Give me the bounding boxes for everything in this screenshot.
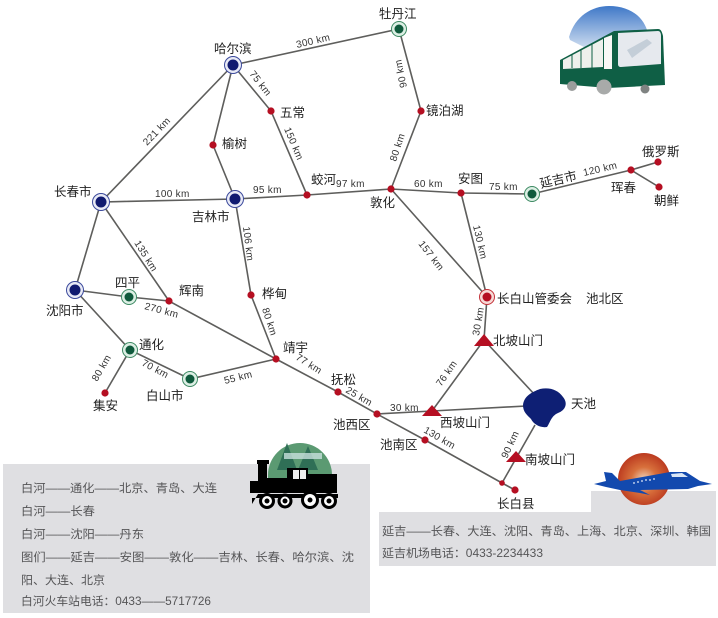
place names: 四平 xyxy=(115,276,140,290)
place names: 靖宇 xyxy=(283,340,308,355)
distance labels: 30 km xyxy=(471,306,487,337)
place names: 桦甸 xyxy=(262,286,287,301)
distance labels: 100 km xyxy=(155,189,190,200)
distance labels: 75 km xyxy=(489,182,518,193)
distance labels: 150 km xyxy=(281,126,305,162)
place names: 镜泊湖 xyxy=(426,103,464,118)
distance labels: 130 km xyxy=(470,224,489,260)
distance labels: 75 km xyxy=(247,69,273,98)
place names: 吉林市 xyxy=(192,209,230,224)
distance labels: 95 km xyxy=(253,185,282,196)
panel: airport information xyxy=(379,491,716,566)
place names: 白山市 xyxy=(146,388,184,403)
distance labels: 77 km xyxy=(293,352,324,377)
icon: bus xyxy=(560,6,665,94)
place names: 珲春 xyxy=(611,181,637,195)
place names: 沈阳市 xyxy=(46,303,84,318)
place names: 池西区 xyxy=(333,418,371,432)
airport routes text: 延吉——长春、大连、沈阳、青岛、上海、北京、深圳、韩国 xyxy=(382,524,711,538)
distance labels: 270 km xyxy=(143,301,179,321)
place names: 榆树 xyxy=(222,136,247,151)
railway routes text xyxy=(21,481,355,608)
distance labels: 80 km xyxy=(388,132,408,163)
place names: 五常 xyxy=(280,106,305,120)
distance labels: 70 km xyxy=(140,358,170,381)
place names: 抚松 xyxy=(331,373,356,387)
place names: 哈尔滨 xyxy=(214,41,252,56)
railway routes text: 白河火车站电话：0433——5717726 xyxy=(21,594,211,608)
distance labels: 76 km xyxy=(434,359,460,389)
icon: steam train xyxy=(250,443,338,508)
place names: 延吉市 xyxy=(538,168,578,191)
place names xyxy=(46,7,680,511)
place names: 池北区 xyxy=(586,292,624,306)
airport routes text xyxy=(382,524,711,560)
distance labels: 221 km xyxy=(141,116,173,148)
distance labels: 90 km xyxy=(393,58,410,89)
place names: 池南区 xyxy=(380,437,418,452)
railway routes text: 白河——长春 xyxy=(21,504,96,518)
place names: 朝鲜 xyxy=(654,194,679,208)
place names: 通化 xyxy=(139,338,165,352)
panel: railway information xyxy=(3,464,370,613)
distance labels: 60 km xyxy=(414,179,443,190)
distance labels xyxy=(90,32,618,460)
railway routes text: 白河——通化——北京、青岛、大连 xyxy=(21,481,218,495)
small town markers xyxy=(101,107,663,494)
place names: 辉南 xyxy=(179,283,204,298)
distance labels: 300 km xyxy=(295,32,331,51)
railway routes text: 图们——延吉——安图——敦化——吉林、长春、哈尔滨、沈 xyxy=(21,550,355,564)
airport routes text: 延吉机场电话：0433-2234433 xyxy=(382,546,543,560)
distance labels: 90 km xyxy=(500,430,522,460)
icon: Tianchi lake xyxy=(523,388,566,427)
major city markers xyxy=(66,56,244,298)
place names: 牡丹江 xyxy=(379,7,417,21)
distance labels: 25 km xyxy=(344,385,374,409)
distance labels: 106 km xyxy=(240,226,255,262)
distance labels: 30 km xyxy=(390,403,419,414)
railway routes text: 白河——沈阳——丹东 xyxy=(21,527,144,541)
distance labels: 80 km xyxy=(90,353,114,384)
green city markers xyxy=(122,22,540,386)
railway routes text: 阳、大连、北京 xyxy=(21,573,105,587)
place names: 天池 xyxy=(571,397,597,411)
distance labels: 97 km xyxy=(336,179,365,190)
mountain gate markers xyxy=(422,334,526,462)
place names: 长白山管委会 xyxy=(497,291,573,306)
place names: 北坡山门 xyxy=(493,333,543,348)
Changbai Mountain committee marker xyxy=(480,290,494,304)
distance labels: 55 km xyxy=(223,369,254,387)
distance labels: 135 km xyxy=(131,239,159,274)
place names: 安图 xyxy=(458,171,483,186)
place names: 长春市 xyxy=(54,184,92,199)
distance labels: 120 km xyxy=(582,160,618,179)
place names: 俄罗斯 xyxy=(642,145,680,159)
distance labels: 80 km xyxy=(259,307,278,337)
place names: 集安 xyxy=(93,398,118,413)
distance labels: 130 km xyxy=(422,425,457,452)
place names: 西坡山门 xyxy=(440,415,490,430)
icon: airplane xyxy=(594,453,712,505)
distance labels: 157 km xyxy=(416,239,446,273)
place names: 敦化 xyxy=(370,195,396,210)
place names: 南坡山门 xyxy=(525,452,575,467)
place names: 长白县 xyxy=(497,496,535,511)
place names: 蛟河 xyxy=(311,172,337,187)
road network lines xyxy=(75,29,659,490)
